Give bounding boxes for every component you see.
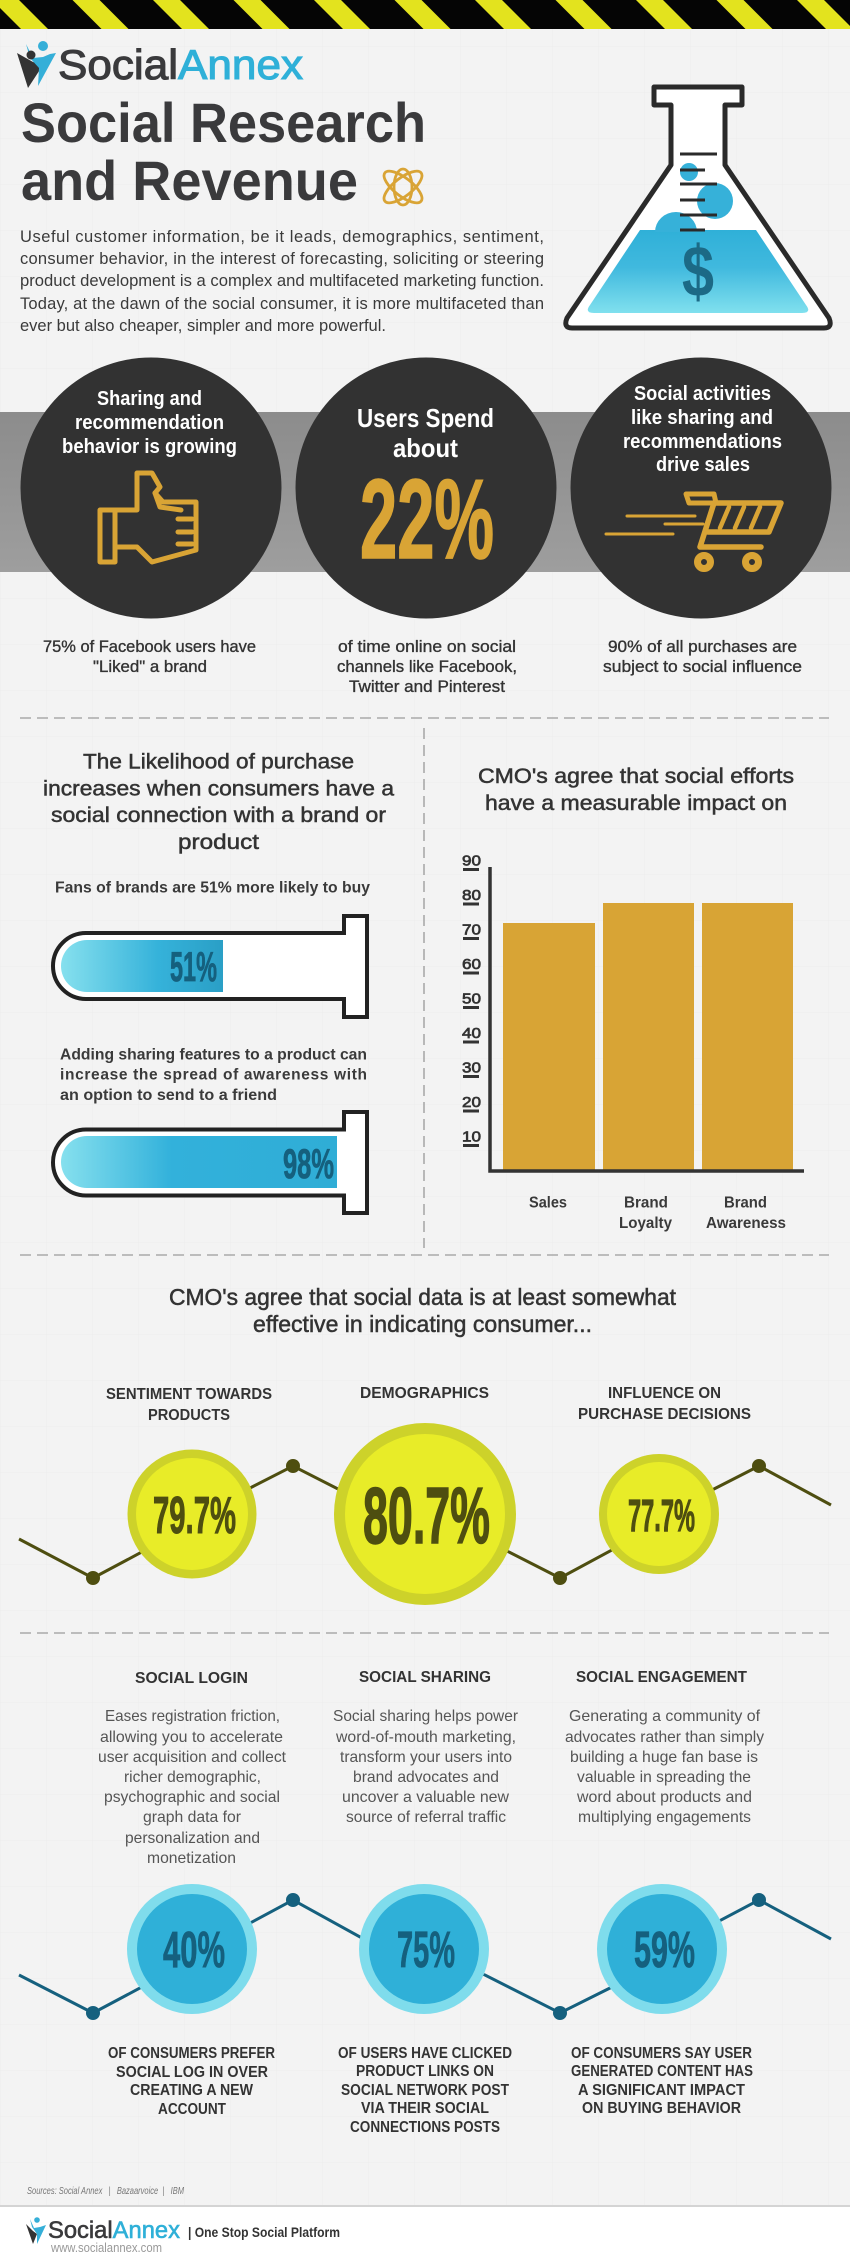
caption: 90% purchases bbox=[603, 638, 802, 676]
caption: time online: Twitter and Pinterest bbox=[349, 678, 505, 696]
bar chart: measurable impact: 50 bbox=[462, 990, 481, 1008]
line chart: yellow percentages bbox=[19, 1423, 831, 1605]
sources: Sources: Social Annex | Bazaarvoice | IBM bbox=[27, 2186, 184, 2197]
caption: 59% consumers: ON BUYING BEHAVIOR bbox=[582, 2100, 741, 2117]
bar chart: measurable impact: Awareness bbox=[706, 1215, 786, 1232]
bar chart: measurable impact: Brand bbox=[624, 1194, 668, 1212]
caption: 40% consumers: ACCOUNT bbox=[158, 2101, 226, 2118]
intro paragraph: Useful customer information, be it leads, demographics, sentiment, bbox=[20, 228, 544, 246]
panel: users spend 22% circle: about bbox=[393, 433, 458, 463]
bar chart: measurable impact: 30 bbox=[462, 1060, 481, 1076]
intro paragraph: Today, at the dawn of the social consumer, it is more multifaceted than bbox=[20, 295, 544, 313]
column: social engagement: valuable in spreading the bbox=[577, 1769, 751, 1786]
bar chart: measurable impact: 80 bbox=[462, 887, 481, 904]
intro paragraph: ever but also cheaper, simpler and more powerful. bbox=[20, 317, 386, 335]
bar chart: measurable impact: 60 bbox=[462, 956, 481, 973]
circle: 79.7%: 79.7% bbox=[153, 1487, 236, 1545]
panel: social activities circle: recommendations bbox=[623, 431, 782, 453]
heading: likelihood of purchase: product bbox=[178, 831, 259, 854]
caption: 75% liked: 75% of Facebook users have bbox=[43, 638, 256, 656]
caption: 59% consumers: GENERATED CONTENT HAS bbox=[571, 2063, 753, 2080]
labels: consumer indicators: INFLUENCE ON bbox=[608, 1385, 721, 1402]
caption: time online bbox=[337, 638, 517, 696]
text: adding sharing features bbox=[60, 1046, 367, 1104]
intro paragraph bbox=[20, 228, 544, 335]
panel: sharing behavior circle: behavior is growing bbox=[62, 436, 237, 458]
panel: social activities circle: Social activities bbox=[634, 383, 771, 405]
caption: 59% consumers: A SIGNIFICANT IMPACT bbox=[578, 2082, 745, 2099]
circle: 77.7% bbox=[599, 1454, 719, 1574]
column: social sharing: brand advocates and bbox=[353, 1769, 499, 1786]
caption: 40% consumers bbox=[108, 2045, 275, 2118]
bar chart: measurable impact: 40 bbox=[462, 1025, 481, 1042]
hazard stripe banner bbox=[0, 0, 850, 29]
labels: consumer indicators: SENTIMENT TOWARDS bbox=[106, 1386, 272, 1403]
caption: 75% users bbox=[338, 2045, 512, 2136]
bar chart: measurable impact: 10 bbox=[462, 1128, 481, 1146]
column: social login: monetization bbox=[147, 1850, 236, 1867]
panel: social activities circle: drive sales bbox=[656, 454, 750, 476]
labels: consumer indicators: PRODUCTS bbox=[148, 1407, 230, 1424]
column: social login: SOCIAL LOGIN bbox=[135, 1670, 248, 1687]
column: social engagement: SOCIAL ENGAGEMENT bbox=[576, 1669, 747, 1686]
column: social engagement: word about products and bbox=[576, 1789, 752, 1806]
bar chart: measurable impact: 20 bbox=[462, 1094, 481, 1111]
title: Social Research bbox=[21, 91, 426, 154]
footer tagline: | One Stop Social Platform bbox=[188, 2224, 340, 2240]
icon: flask with dollar sign: $ bbox=[682, 232, 714, 312]
caption: 90% purchases: 90% of all purchases are bbox=[608, 638, 797, 656]
circle: 75% bbox=[359, 1884, 489, 2014]
column: social login: Eases registration friction, bbox=[105, 1708, 280, 1725]
heading: social data effectiveness: CMO's agree that social data is at least somewhat bbox=[169, 1284, 677, 1310]
column: social engagement: advocates rather than simply bbox=[565, 1729, 764, 1746]
heading: measurable impact: have a measurable impact on bbox=[485, 792, 787, 815]
logo wordmark: SocialAnnex bbox=[58, 41, 303, 88]
column: social engagement: multiplying engagements bbox=[578, 1809, 751, 1826]
icon: flask with dollar sign bbox=[566, 87, 830, 328]
title bbox=[21, 91, 426, 212]
caption: time online: channels like Facebook, bbox=[337, 658, 517, 676]
panel: users spend 22% circle bbox=[296, 358, 556, 618]
column: social sharing: uncover a valuable new bbox=[342, 1789, 509, 1806]
line chart: blue percentages bbox=[19, 1884, 831, 2020]
heading: social data effectiveness: effective in indicating consumer... bbox=[253, 1311, 592, 1337]
column: social sharing: word-of-mouth marketing, bbox=[335, 1729, 516, 1746]
caption: 40% consumers: SOCIAL LOG IN OVER bbox=[116, 2064, 268, 2081]
icon: people logo bbox=[17, 41, 56, 88]
text: fans of brands: Fans of brands are 51% more likely to buy bbox=[55, 880, 370, 896]
panel: sharing behavior circle: recommendation bbox=[75, 412, 224, 434]
caption: 75% liked bbox=[43, 638, 256, 676]
caption: 40% consumers: OF CONSUMERS PREFER bbox=[108, 2045, 275, 2062]
circle: 75%: 75% bbox=[397, 1921, 455, 1978]
caption: 75% users: CONNECTIONS POSTS bbox=[350, 2119, 500, 2136]
heading: measurable impact: CMO's agree that social efforts bbox=[478, 765, 794, 788]
icon: atom bbox=[379, 166, 427, 208]
circle: 80.7% bbox=[334, 1423, 516, 1605]
intro paragraph: consumer behavior, in the interest of forecasting, soliciting or steering bbox=[20, 250, 544, 268]
caption: 75% users: VIA THEIR SOCIAL bbox=[361, 2100, 489, 2117]
heading: likelihood of purchase bbox=[43, 750, 394, 854]
caption: 90% purchases: subject to social influence bbox=[603, 658, 802, 676]
heading: measurable impact bbox=[478, 765, 794, 815]
caption: 75% liked: "Liked" a brand bbox=[93, 658, 207, 676]
column: social login: allowing you to accelerate bbox=[100, 1729, 283, 1746]
heading: likelihood of purchase: increases when consumers have a bbox=[43, 778, 394, 800]
panel: social activities circle bbox=[570, 358, 832, 618]
column: social sharing: transform your users into bbox=[340, 1749, 512, 1766]
column: social engagement bbox=[565, 1669, 764, 1826]
column: social sharing bbox=[333, 1669, 519, 1826]
footer url: www.socialannex.com bbox=[50, 2240, 162, 2255]
bar chart: measurable impact: 70 bbox=[462, 922, 481, 938]
column: social sharing: Social sharing helps power bbox=[333, 1708, 519, 1725]
column: social login: psychographic and social bbox=[104, 1789, 280, 1806]
column: social login: richer demographic, bbox=[124, 1769, 261, 1786]
footer wordmark: SocialAnnex bbox=[48, 2217, 180, 2244]
title: and Revenue bbox=[21, 149, 358, 212]
bar chart: measurable impact: Loyalty bbox=[619, 1215, 672, 1232]
test tube: 98%: 98% bbox=[283, 1140, 334, 1187]
column: social engagement: building a huge fan base is bbox=[570, 1749, 758, 1766]
grey band bbox=[0, 412, 850, 572]
circle: 59%: 59% bbox=[634, 1921, 695, 1978]
bar chart: measurable impact: Brand bbox=[724, 1194, 767, 1212]
intro paragraph: product development is a complex and multifaceted marketing function. bbox=[20, 272, 544, 290]
text: adding sharing features: increase the spread of awareness with bbox=[60, 1066, 367, 1084]
bar chart: measurable impact bbox=[462, 852, 804, 1232]
panel: sharing behavior circle: Sharing and bbox=[97, 388, 202, 410]
text: adding sharing features: Adding sharing features to a product can bbox=[60, 1046, 367, 1064]
circle: 59% bbox=[597, 1884, 727, 2014]
bar chart: measurable impact: Sales bbox=[529, 1194, 567, 1212]
column: social sharing: SOCIAL SHARING bbox=[359, 1669, 491, 1686]
column: social login: graph data for bbox=[143, 1809, 242, 1826]
circle: 40% bbox=[127, 1884, 257, 2014]
heading: social data effectiveness bbox=[169, 1284, 677, 1337]
column: social engagement: Generating a community of bbox=[569, 1708, 761, 1725]
logo: SocialAnnex bbox=[17, 41, 303, 88]
circle: 40%: 40% bbox=[163, 1921, 225, 1978]
icon: shopping cart bbox=[606, 494, 781, 568]
labels: consumer indicators: PURCHASE DECISIONS bbox=[578, 1406, 751, 1423]
column: social login: personalization and bbox=[125, 1830, 260, 1847]
circle: 80.7%: 80.7% bbox=[363, 1471, 490, 1560]
test tube: 98% bbox=[53, 1112, 367, 1213]
labels: consumer indicators: DEMOGRAPHICS bbox=[360, 1385, 489, 1402]
icon: footer logo bbox=[26, 2217, 46, 2244]
caption: 59% consumers: OF CONSUMERS SAY USER bbox=[571, 2045, 752, 2062]
column: social login bbox=[98, 1670, 287, 1867]
labels: consumer indicators bbox=[106, 1385, 751, 1424]
circle: 77.7%: 77.7% bbox=[628, 1490, 695, 1541]
panel: users spend 22% circle: 22% bbox=[360, 456, 494, 582]
text: adding sharing features: an option to send to a friend bbox=[60, 1087, 277, 1104]
heading: likelihood of purchase: social connection with a brand or bbox=[51, 804, 386, 827]
heading: likelihood of purchase: The Likelihood of purchase bbox=[83, 750, 354, 774]
test tube: 51% bbox=[53, 916, 367, 1017]
panel: social activities circle: like sharing and bbox=[631, 407, 773, 429]
column: social sharing: source of referral traffic bbox=[346, 1809, 506, 1826]
panel: sharing behavior circle bbox=[20, 358, 282, 618]
caption: 75% users: PRODUCT LINKS ON bbox=[356, 2063, 494, 2080]
caption: 75% users: OF USERS HAVE CLICKED bbox=[338, 2045, 512, 2062]
bar chart: measurable impact: 90 bbox=[462, 852, 481, 870]
footer bbox=[0, 2205, 850, 2265]
icon: thumbs up bbox=[100, 473, 196, 562]
column: social login: user acquisition and collect bbox=[98, 1749, 287, 1766]
circle: 79.7% bbox=[128, 1450, 256, 1578]
caption: 40% consumers: CREATING A NEW bbox=[130, 2082, 254, 2099]
caption: 75% users: SOCIAL NETWORK POST bbox=[341, 2082, 509, 2099]
test tube: 51%: 51% bbox=[170, 943, 217, 990]
caption: time online: of time online on social bbox=[338, 638, 516, 656]
panel: users spend 22% circle: Users Spend bbox=[357, 403, 494, 433]
caption: 59% consumers bbox=[571, 2045, 753, 2117]
